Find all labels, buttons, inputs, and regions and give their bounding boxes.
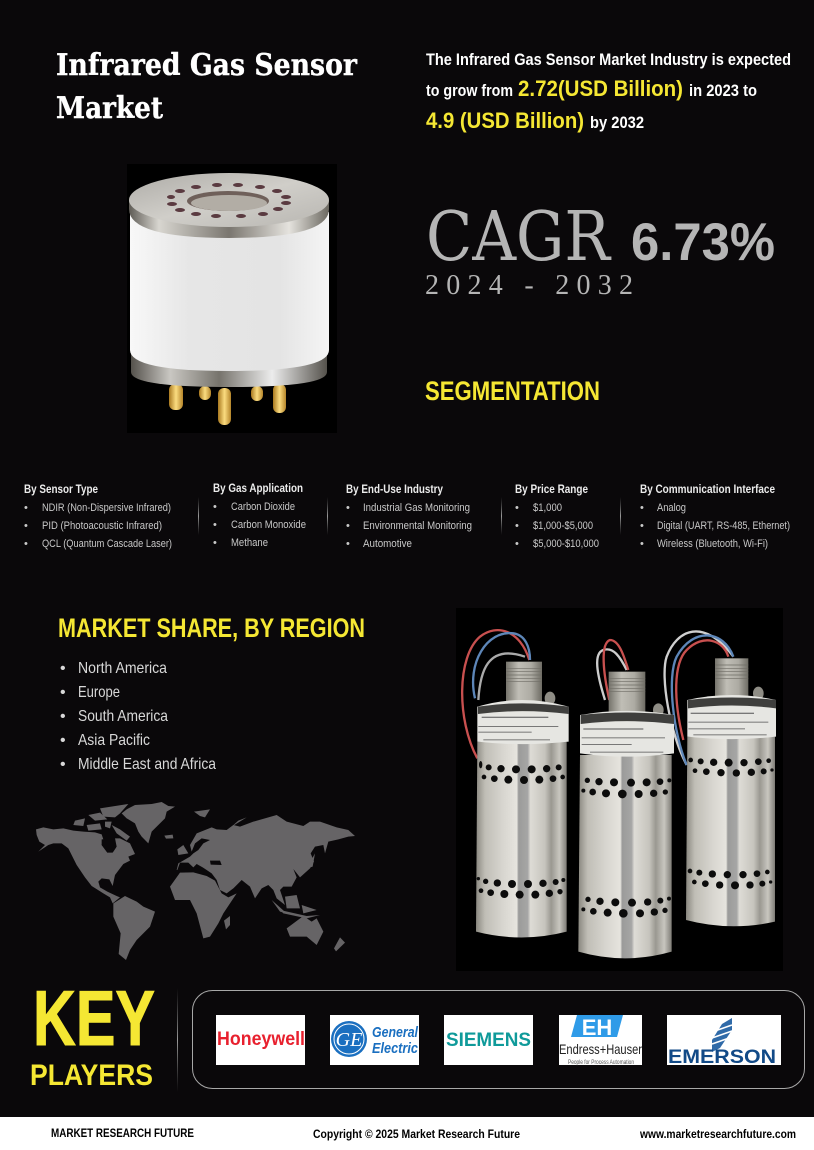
column: by price range: • (515, 538, 519, 550)
region list: • (60, 756, 66, 773)
column: by communication interface: • (640, 520, 644, 532)
key players heading (30, 974, 155, 1092)
footer: Copyright © 2025 Market Research Future (313, 1127, 520, 1141)
region list: Middle East and Africa (78, 756, 216, 773)
logo: Endress+Hauser: EH (582, 1015, 612, 1040)
column: by sensor type: • (24, 502, 28, 514)
logo: General Electric (330, 1015, 419, 1065)
column: by price range: By Price Range (515, 482, 588, 496)
footer (0, 1117, 814, 1150)
mesh window (187, 191, 269, 211)
column: by end-use industry: Industrial Gas Monitoring (363, 502, 470, 514)
key players heading: PLAYERS (30, 1059, 153, 1092)
CAGR figure: 2024 - 2032 (425, 270, 633, 301)
market growth statement: 4.9 (USD Billion) (426, 108, 584, 133)
cylinder 2 (578, 672, 674, 958)
column: by gas application (213, 481, 306, 549)
column: by price range (515, 482, 599, 550)
bottom ring (131, 350, 327, 387)
column: by end-use industry: • (346, 520, 350, 532)
market growth statement: by 2032 (590, 114, 644, 132)
column: by end-use industry: Automotive (363, 538, 412, 550)
pins (169, 384, 286, 425)
logo: Honeywell (216, 1015, 305, 1065)
logo: General Electric: General (372, 1024, 419, 1041)
column: by gas application: • (213, 519, 217, 531)
logo: Endress+Hauser (559, 1015, 642, 1066)
column: by sensor type: NDIR (Non-Dispersive Infrared) (42, 502, 171, 514)
column: by sensor type (24, 482, 172, 550)
region list: Europe (78, 684, 120, 701)
market growth statement (426, 51, 791, 133)
column: by communication interface: By Communication Interface (640, 482, 775, 496)
column: by price range: $1,000-$5,000 (533, 520, 593, 532)
column: by communication interface: Analog (657, 502, 686, 514)
column: by communication interface: • (640, 502, 644, 514)
market growth statement: to grow from (426, 82, 513, 100)
cylinder 3 (686, 658, 776, 926)
heading: segmentation: SEGMENTATION (425, 376, 600, 406)
column: by price range: $5,000-$10,000 (533, 538, 599, 550)
region list: • (60, 660, 66, 677)
segmentation columns (24, 481, 790, 550)
column: by gas application: Methane (231, 537, 268, 549)
column: by gas application: Carbon Dioxide (231, 501, 295, 513)
cylinder 1 (476, 662, 569, 937)
vent holes (167, 183, 291, 218)
CAGR figure: 6.73% (631, 213, 775, 272)
logo: General Electric: GE (336, 1029, 362, 1051)
wires (462, 630, 733, 765)
column: by communication interface (640, 482, 790, 550)
region list: North America (78, 660, 167, 677)
market growth statement: in 2023 to (689, 82, 757, 100)
column: by communication interface: Wireless (Bluetooth, Wi-Fi) (657, 538, 768, 550)
CAGR figure: CAGR (426, 198, 612, 277)
column: by price range: • (515, 520, 519, 532)
title (56, 48, 358, 126)
footer: MARKET RESEARCH FUTURE (51, 1126, 194, 1140)
column: by end-use industry: By End-Use Industry (346, 482, 443, 496)
column: by price range: • (515, 502, 519, 514)
logo: General Electric: Electric (372, 1040, 419, 1057)
region list: • (60, 684, 66, 701)
column: by gas application: Carbon Monoxide (231, 519, 306, 531)
white body (130, 212, 329, 371)
top face (129, 173, 329, 227)
region list: • (60, 708, 66, 725)
column: by sensor type: • (24, 520, 28, 532)
image: gas sensor module (127, 164, 337, 433)
logo: Endress+Hauser: Endress+Hauser (559, 1041, 642, 1057)
CAGR figure (425, 198, 775, 301)
column: by sensor type: PID (Photoacoustic Infrared) (42, 520, 162, 532)
logo: Siemens: SIEMENS (446, 1030, 531, 1051)
column: by communication interface: Digital (UART, RS-485, Ethernet) (657, 520, 790, 532)
logo: Honeywell: Honeywell (217, 1029, 305, 1050)
top rim (129, 200, 329, 238)
key players heading: KEY (33, 974, 155, 1062)
region list: South America (78, 708, 168, 725)
column: by sensor type: • (24, 538, 28, 550)
column: by communication interface: • (640, 538, 644, 550)
column: by gas application: • (213, 537, 217, 549)
column: by gas application: • (213, 501, 217, 513)
logo: Siemens (444, 1015, 533, 1065)
region list: Asia Pacific (78, 732, 150, 749)
image: three stainless steel sensors (456, 608, 783, 971)
column: by end-use industry (346, 482, 472, 550)
column: by sensor type: QCL (Quantum Cascade Laser) (42, 538, 172, 550)
region list: • (60, 732, 66, 749)
column: by end-use industry: • (346, 538, 350, 550)
column: by end-use industry: • (346, 502, 350, 514)
world map (36, 802, 355, 960)
logo: Emerson: EMERSON (668, 1047, 776, 1068)
logo: Emerson (667, 1015, 781, 1068)
heading: market share by region: MARKET SHARE, BY REGION (58, 613, 365, 643)
region list (60, 660, 216, 773)
column: by sensor type: By Sensor Type (24, 482, 98, 496)
title: Market (56, 91, 163, 126)
market growth statement: 2.72(USD Billion) (518, 76, 683, 101)
column: by gas application: By Gas Application (213, 481, 303, 495)
logo: Endress+Hauser: People for Process Automation (568, 1060, 634, 1066)
column: by end-use industry: Environmental Monitoring (363, 520, 472, 532)
title: Infrared Gas Sensor (56, 48, 358, 83)
column: by price range: $1,000 (533, 502, 562, 514)
key players panel (192, 990, 804, 1088)
